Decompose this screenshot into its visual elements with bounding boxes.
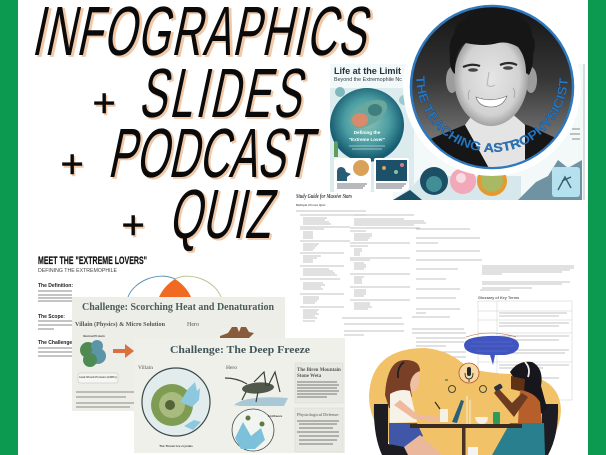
antifreeze detail circle: Antifreeze xyxy=(268,414,283,418)
title text: SLIDES xyxy=(135,55,313,132)
hero label: Hero xyxy=(187,322,199,328)
protein illustration: Normal Protein xyxy=(83,334,105,338)
panel: study guide document: Glossary of Key Terms xyxy=(478,296,519,300)
panel: challenge deep freeze slide xyxy=(134,338,345,453)
left green border xyxy=(0,0,18,455)
panel: study guide document: Multiple Choice Quiz xyxy=(296,203,326,207)
slide card: observer xyxy=(334,158,371,192)
slide heading: MEET THE "EXTREME LOVERS" xyxy=(38,255,147,267)
villain label: Villain xyxy=(138,365,153,371)
definition text: The Scope: xyxy=(38,314,65,320)
physiological defense card: Physiological Defense: xyxy=(297,412,339,417)
antifreeze detail circle xyxy=(232,409,283,451)
title shadow: + xyxy=(62,144,85,188)
right woman xyxy=(492,362,547,455)
portrait badge: The Teaching Astrophysicist xyxy=(403,4,581,176)
title text: + xyxy=(122,204,145,248)
table with cups and tablet xyxy=(410,396,522,455)
protein illustration xyxy=(80,334,106,367)
yellow heart-shaped backdrop xyxy=(369,348,561,455)
title text: + xyxy=(92,82,116,126)
species card xyxy=(295,363,343,403)
physiological defense card xyxy=(295,408,343,452)
definition text xyxy=(38,283,74,356)
panel: podcast illustration xyxy=(369,333,561,455)
cell illustration: Defining the xyxy=(354,130,381,135)
title text: QUIZ xyxy=(165,176,283,253)
hero animal xyxy=(220,327,254,338)
title shadow: SLIDES xyxy=(137,57,315,134)
portrait photo xyxy=(431,28,554,167)
small sound icons xyxy=(445,380,486,392)
heat arrow xyxy=(113,344,134,358)
slide ice mountains xyxy=(518,64,585,200)
right green border xyxy=(588,0,606,455)
slide notes xyxy=(76,392,134,407)
frozen cell illustration xyxy=(142,368,210,448)
panel: challenge scorching heat slide xyxy=(72,297,285,411)
title shadow: + xyxy=(94,84,117,128)
species card: Stone Weta xyxy=(297,374,322,379)
definition text: The Definition: xyxy=(38,283,73,289)
slide heading: Life at the Limit xyxy=(334,66,401,76)
protein caption box: Heat Shock Proteins (HSPs) xyxy=(79,375,117,379)
title shadow: PODCAST xyxy=(106,117,325,194)
cricket illustration xyxy=(225,372,288,406)
slide habitat circles xyxy=(393,166,521,200)
badge caption: THE TEACHING ASTROPHYSICIST xyxy=(416,76,568,152)
microphone icon xyxy=(459,363,479,383)
villain and solution label: Villain (Physics) & Micro Solution xyxy=(75,321,166,328)
panel: study guide document: Study Guide for Massive Stars xyxy=(296,193,352,200)
title text: PODCAST xyxy=(104,115,323,192)
slide heading: Challenge: Scorching Heat and Denaturation xyxy=(82,302,274,313)
left woman xyxy=(385,360,442,455)
speech bubble xyxy=(464,333,519,365)
title shadow xyxy=(30,0,381,255)
title: INFOGRAPHICS + SLIDES + PODCAST + QUIZ xyxy=(28,0,381,255)
slide heading: Challenge: The Deep Freeze xyxy=(170,344,310,356)
protein caption box xyxy=(78,373,118,383)
panel: study guide document xyxy=(290,190,585,415)
slide subheading: DEFINING THE EXTREMOPHILE xyxy=(38,268,118,274)
hero label: Hero xyxy=(226,365,237,371)
title text xyxy=(28,0,378,253)
slide subheading: Beyond the Extremophile Nc xyxy=(334,77,402,83)
venn diagram xyxy=(128,276,221,297)
frozen cell illustration: The Threat: Ice crystals xyxy=(159,444,193,448)
title text: + xyxy=(60,142,84,186)
title shadow: QUIZ xyxy=(167,178,285,255)
slide card: network xyxy=(374,158,409,192)
definition text: The Challenge: xyxy=(38,340,74,346)
cell illustration: "Extreme Lover" xyxy=(349,137,385,142)
panel: life at the limit slide xyxy=(330,64,585,200)
chairs xyxy=(374,404,558,455)
title shadow: + xyxy=(123,206,146,250)
cell illustration xyxy=(330,87,409,162)
species card: The Biren Mountain xyxy=(297,368,341,373)
panel: meet the extreme lovers slide xyxy=(38,255,221,356)
